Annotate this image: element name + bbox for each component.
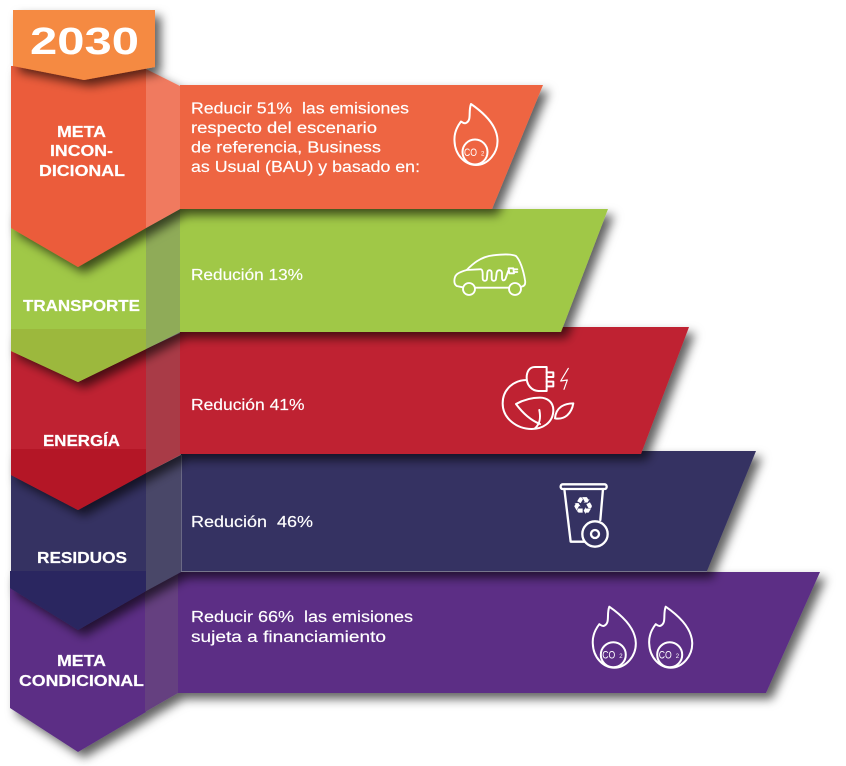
icon: CO2 flame 2: CO	[659, 650, 672, 662]
heading: meta incondicional	[39, 124, 125, 180]
heading: meta condicional: CONDICIONAL	[19, 673, 144, 690]
panel: meta incondicional	[11, 66, 543, 267]
text: reducir 51%: as Usual (BAU) y basado en:	[191, 159, 420, 176]
heading: meta incondicional: META	[57, 124, 106, 141]
icon: CO2 flame 1	[593, 607, 636, 668]
text: reducion 13%: Redución 13%	[191, 267, 303, 284]
panel: energia	[11, 327, 689, 510]
text: reducir 66%	[191, 609, 413, 646]
icon: CO2 flame 2	[649, 607, 692, 668]
icon: plug and leaves	[503, 367, 573, 429]
icon: recycling bin	[561, 484, 608, 547]
heading: meta condicional	[19, 653, 144, 690]
text: reducir 66%: Reducir 66% las emisiones	[191, 609, 413, 626]
text: reducir 51%: Reducir 51% las emisiones	[191, 100, 409, 118]
text: reducir 51%: respecto del escenario	[191, 120, 377, 137]
icon: CO2 flame 1: 2	[619, 654, 623, 660]
panel: transporte	[11, 209, 608, 382]
icon: CO2 flame	[454, 104, 498, 165]
icon: CO2 flame: 2	[481, 152, 485, 158]
icon: recycling bin: ♻	[572, 492, 594, 520]
banner: 2030	[13, 10, 155, 80]
text: reducir 51%: de referencia, Business	[191, 140, 381, 156]
icon: electric car	[454, 255, 525, 295]
text: reducir 66%: sujeta a financiamiento	[191, 629, 386, 646]
heading: energia: ENERGÍA	[43, 433, 120, 450]
icon: CO2 flame: CO	[464, 147, 477, 159]
panel: residuos	[10, 451, 756, 630]
text: reducion 46%: Redución 46%	[191, 514, 313, 531]
heading: transporte: TRANSPORTE	[23, 298, 140, 315]
heading: meta condicional: META	[57, 653, 106, 670]
heading: residuos: RESIDUOS	[37, 550, 127, 567]
heading: meta incondicional: INCON-	[50, 143, 113, 160]
heading: 2030: 2030	[30, 21, 139, 63]
icon: CO2 flame 2: 2	[676, 654, 680, 660]
text: reducir 51%	[191, 100, 420, 176]
text: reducion 41%: Redución 41%	[191, 397, 305, 414]
panel: meta condicional	[10, 571, 820, 752]
heading: meta incondicional: DICIONAL	[39, 163, 125, 180]
icon: CO2 flame 1: CO	[602, 650, 616, 662]
